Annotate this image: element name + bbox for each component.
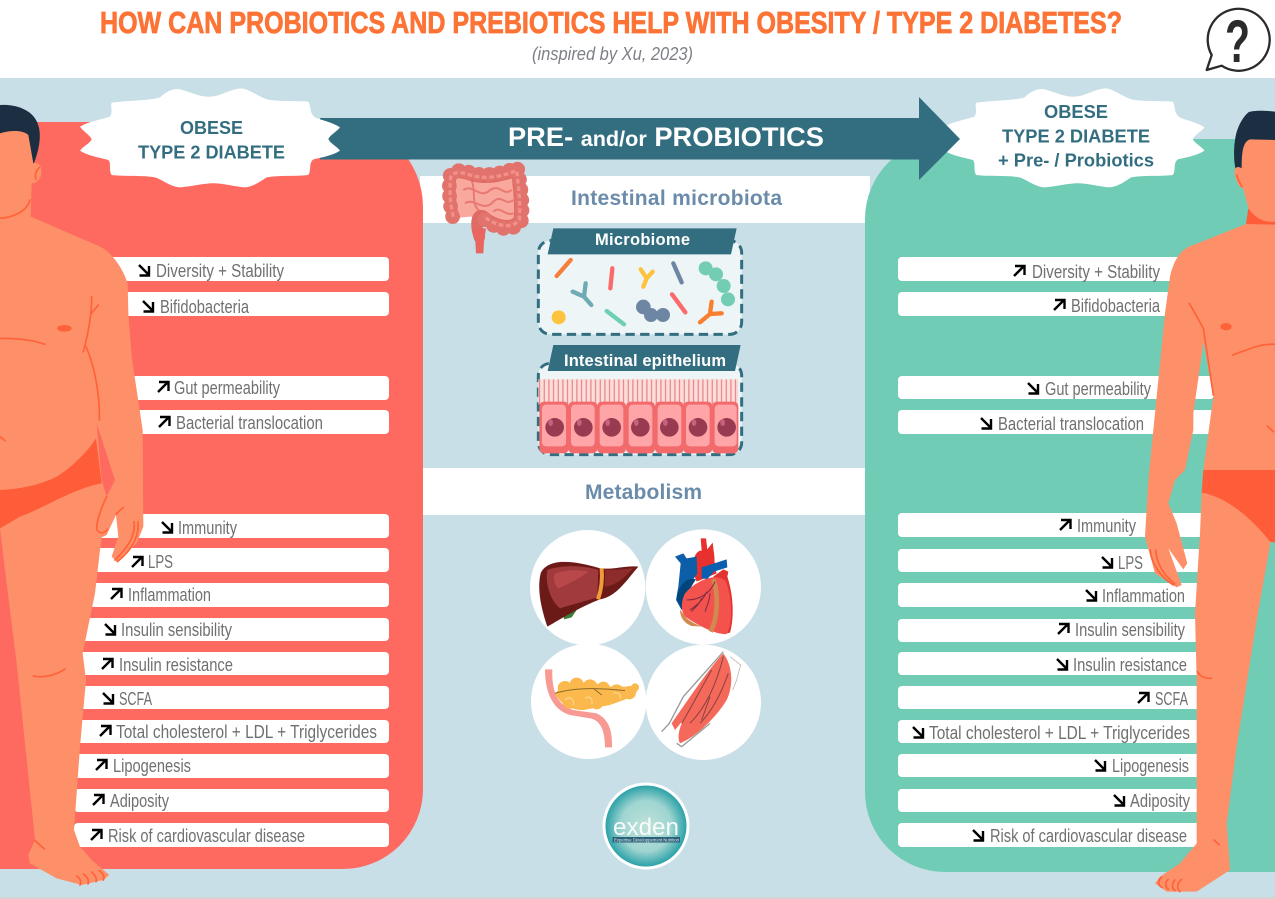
- row: adiposity: Adiposity: [110, 790, 170, 811]
- row: lipogenesis: Lipogenesis: [113, 755, 191, 776]
- callout: obese type 2 diabete + pre-/probiotics: TYPE 2 DIABETE: [1002, 126, 1150, 146]
- row: lps: [898, 549, 1214, 573]
- icon: intestine: [449, 167, 522, 253]
- row: bacterial translocation: Bacterial translocation: [998, 413, 1144, 434]
- row: insulin sensibility: [898, 619, 1214, 642]
- figure: overweight man: [0, 105, 143, 885]
- row: inflammation: Inflammation: [1102, 585, 1185, 606]
- bottom edge: [0, 897, 1275, 899]
- panel: obese, type 2 diabete + pre-/probiotics: [865, 111, 1275, 892]
- row: lipogenesis: [74, 754, 389, 778]
- row: diversity + stability: [74, 257, 389, 281]
- row: bifidobacteria: [74, 292, 389, 317]
- row: gut permeability: [898, 376, 1214, 399]
- row: scfa: [898, 686, 1214, 709]
- icon: question speech bubble: [1207, 8, 1270, 75]
- band: metabolism: Metabolism: [585, 481, 702, 504]
- logo: exden: Expertise Développement Nutrition: [614, 838, 679, 842]
- row: diversity + stability: [898, 257, 1214, 282]
- row: scfa: [74, 686, 389, 709]
- row: bifidobacteria: [898, 292, 1214, 316]
- row: scfa: SCFA: [1155, 688, 1188, 709]
- band: metabolism: [420, 468, 870, 515]
- row: gut permeability: Gut permeability: [174, 377, 281, 398]
- row: lipogenesis: [898, 754, 1214, 777]
- row: adiposity: [898, 789, 1214, 812]
- row: adiposity: Adiposity: [1130, 790, 1191, 811]
- row: insulin resistance: Insulin resistance: [1073, 654, 1187, 675]
- band: intestinal microbiota: [420, 176, 870, 223]
- row: cardiovascular risk: Risk of cardiovascular disease: [990, 825, 1187, 846]
- row: total cholesterol: Total cholesterol + LDL + Triglycerides: [116, 721, 377, 742]
- band: intestinal microbiota: Intestinal microbiota: [571, 187, 782, 210]
- row: lipogenesis: Lipogenesis: [1112, 755, 1189, 776]
- organ: muscle: [646, 645, 761, 760]
- row: cardiovascular risk: [74, 823, 389, 847]
- row: adiposity: [74, 789, 389, 812]
- arrow: pre- and/or probiotics: [320, 97, 960, 180]
- logo: exden: exden: [613, 814, 679, 841]
- organ: pancreas: [531, 644, 646, 759]
- subtitle: (inspired by Xu, 2023): [532, 44, 693, 64]
- row: bacterial translocation: [898, 410, 1214, 434]
- row: lps: LPS: [148, 551, 173, 572]
- panel: intestinal epithelium: Intestinal epithelium: [564, 352, 726, 370]
- row: immunity: [898, 513, 1214, 537]
- organ: heart: [646, 529, 761, 645]
- callout: obese type 2 diabete + pre-/probiotics: + Pre- / Probiotics: [998, 150, 1154, 170]
- callout: obese type 2 diabete + pre-/probiotics: OBESE: [1044, 102, 1108, 122]
- row: bifidobacteria: Bifidobacteria: [160, 296, 250, 317]
- row: total cholesterol: Total cholesterol + LDL + Triglycerides: [929, 722, 1190, 743]
- callout: obese type 2 diabete: OBESE: [180, 118, 243, 138]
- row: bacterial translocation: [74, 410, 389, 434]
- row: gut permeability: Gut permeability: [1045, 378, 1152, 399]
- callout: obese type 2 diabete: [80, 88, 340, 187]
- row: immunity: [74, 514, 389, 538]
- figure: leaner man: [1145, 111, 1275, 892]
- row: lps: [74, 548, 389, 572]
- row: lps: LPS: [1118, 552, 1143, 573]
- logo: exden: [602, 782, 690, 870]
- row: inflammation: Inflammation: [128, 584, 211, 605]
- row: scfa: SCFA: [119, 688, 152, 709]
- row: inflammation: [898, 583, 1214, 607]
- row: diversity + stability: Diversity + Stability: [156, 260, 285, 281]
- row: insulin sensibility: Insulin sensibility: [1075, 619, 1186, 640]
- icon: question speech bubble: ?: [1225, 8, 1250, 75]
- row: cardiovascular risk: Risk of cardiovascular disease: [108, 825, 305, 846]
- row: bifidobacteria: Bifidobacteria: [1071, 295, 1161, 316]
- row: insulin resistance: Insulin resistance: [119, 654, 233, 675]
- arrow: pre- and/or probiotics: PRE- and/or PROBIOTICS: [508, 122, 824, 152]
- row: insulin sensibility: [74, 618, 389, 641]
- row: immunity: Immunity: [178, 517, 238, 538]
- panel: intestinal epithelium: [538, 345, 742, 455]
- row: cardiovascular risk: [898, 823, 1214, 847]
- row: diversity + stability: Diversity + Stability: [1032, 261, 1161, 282]
- row: immunity: Immunity: [1077, 515, 1137, 536]
- row: insulin resistance: [74, 652, 389, 675]
- row: insulin resistance: [898, 652, 1214, 675]
- panel: microbiome: [538, 228, 742, 334]
- organ: liver: [530, 530, 645, 645]
- callout: obese type 2 diabete + pre-/probiotics: [944, 88, 1204, 187]
- row: bacterial translocation: Bacterial translocation: [176, 412, 323, 433]
- row: inflammation: [74, 583, 389, 607]
- callout: obese type 2 diabete: TYPE 2 DIABETE: [138, 142, 285, 162]
- panel: obese, type 2 diabete: [0, 105, 423, 885]
- row: gut permeability: [74, 376, 389, 400]
- row: insulin sensibility: Insulin sensibility: [121, 619, 233, 640]
- panel: microbiome: Microbiome: [595, 231, 690, 249]
